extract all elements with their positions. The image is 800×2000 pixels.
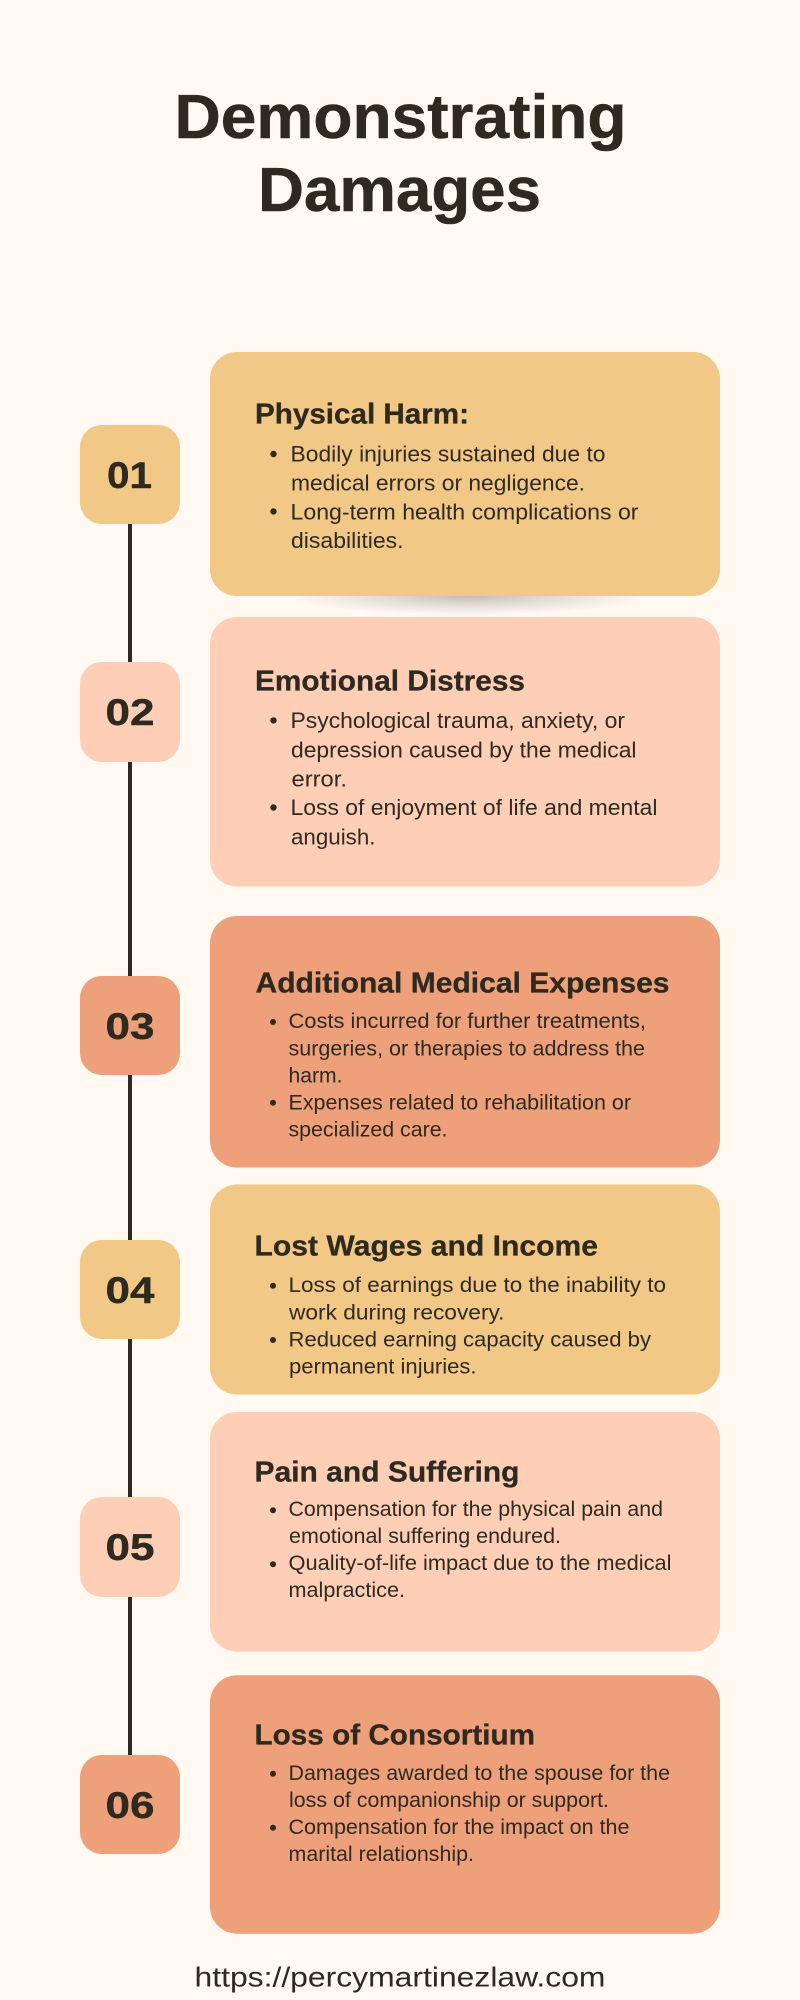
panel: emotional distress (210, 617, 720, 886)
heading: emotional distress: Emotional Distress (255, 666, 525, 698)
bullet list: loss of consortium: loss of companionship or support. (289, 1789, 609, 1812)
bullet list: pain and suffering: emotional suffering endured. (289, 1525, 561, 1548)
bullet list: additional medical expenses: Costs incurred for further treatments, (288, 1010, 646, 1033)
bullet list: emotional distress (270, 708, 658, 849)
number badge 03 (80, 976, 180, 1075)
number badge 01: 01 (107, 455, 152, 496)
bullet list: emotional distress: error. (292, 766, 347, 791)
title (174, 83, 626, 225)
bullet list: emotional distress: anguish. (291, 824, 376, 849)
number badge 05 (80, 1497, 180, 1597)
footer url: https://percymartinezlaw.com (194, 1962, 606, 1993)
number badge 03: 03 (106, 1006, 154, 1047)
bullet list: additional medical expenses: surgeries, or therapies to address the (288, 1037, 645, 1060)
card shadow under panel 1 (290, 577, 646, 615)
panel: loss of consortium (210, 1675, 720, 1934)
panel: physical harm (210, 352, 720, 596)
bullet list: additional medical expenses: specialized care. (288, 1119, 448, 1142)
number badge 02 (80, 662, 180, 762)
heading: physical harm: Physical Harm: (255, 399, 469, 431)
bullet list: pain and suffering: Compensation for the physical pain and (288, 1498, 663, 1521)
number badge 06: 06 (106, 1785, 154, 1826)
bullet list: pain and suffering: malpractice. (288, 1579, 405, 1602)
bullet list: loss of consortium: Compensation for the impact on the (288, 1816, 630, 1839)
panel: additional medical expenses (210, 916, 720, 1168)
bullet list: loss of consortium: Damages awarded to the spouse for the (288, 1762, 670, 1785)
bullet list: physical harm: Bodily injuries sustained due to (290, 441, 606, 466)
bullet list: lost wages and income: work during recovery. (288, 1301, 504, 1324)
heading: additional medical expenses: Additional Medical Expenses (256, 968, 670, 1000)
number badge 06 (80, 1755, 180, 1854)
timeline connector line (128, 500, 132, 1780)
bullet list: lost wages and income: Reduced earning capacity caused by (288, 1328, 652, 1351)
number badge 04: 04 (106, 1270, 155, 1311)
panel: lost wages and income (210, 1184, 720, 1394)
bullet list: emotional distress: Psychological trauma, anxiety, or (290, 708, 625, 733)
heading: loss of consortium: Loss of Consortium (254, 1720, 535, 1752)
bullet list: pain and suffering (270, 1498, 672, 1602)
bullet list: pain and suffering: Quality-of-life impact due to the medical (288, 1552, 672, 1575)
bullet list: additional medical expenses: Expenses related to rehabilitation or (288, 1091, 631, 1114)
bullet list: loss of consortium (270, 1762, 670, 1866)
bullet list: emotional distress: depression caused by the medical (291, 738, 636, 762)
number badge 02: 02 (106, 692, 154, 733)
heading: lost wages and income: Lost Wages and Income (254, 1231, 598, 1263)
panel: pain and suffering (210, 1412, 720, 1652)
bullet list: physical harm: disabilities. (291, 528, 404, 553)
bullet list: emotional distress: Loss of enjoyment of life and mental (290, 795, 658, 820)
bullet list: physical harm: medical errors or negligence. (291, 470, 585, 495)
title: Demonstrating (174, 83, 626, 152)
bullet list: lost wages and income: Loss of earnings due to the inability to (288, 1274, 666, 1297)
number badge 01 (80, 425, 180, 524)
number badge 05: 05 (106, 1527, 154, 1568)
title: Damages (258, 156, 541, 225)
bullet list: physical harm (270, 441, 638, 553)
heading: pain and suffering: Pain and Suffering (254, 1457, 520, 1489)
bullet list: lost wages and income: permanent injuries. (289, 1356, 476, 1379)
number badge 04 (80, 1240, 180, 1339)
bullet list: lost wages and income (270, 1274, 666, 1379)
bullet list: additional medical expenses (270, 1010, 646, 1142)
bullet list: physical harm: Long-term health complications or (290, 499, 638, 524)
bullet list: additional medical expenses: harm. (288, 1064, 342, 1087)
bullet list: loss of consortium: marital relationship. (288, 1843, 474, 1866)
